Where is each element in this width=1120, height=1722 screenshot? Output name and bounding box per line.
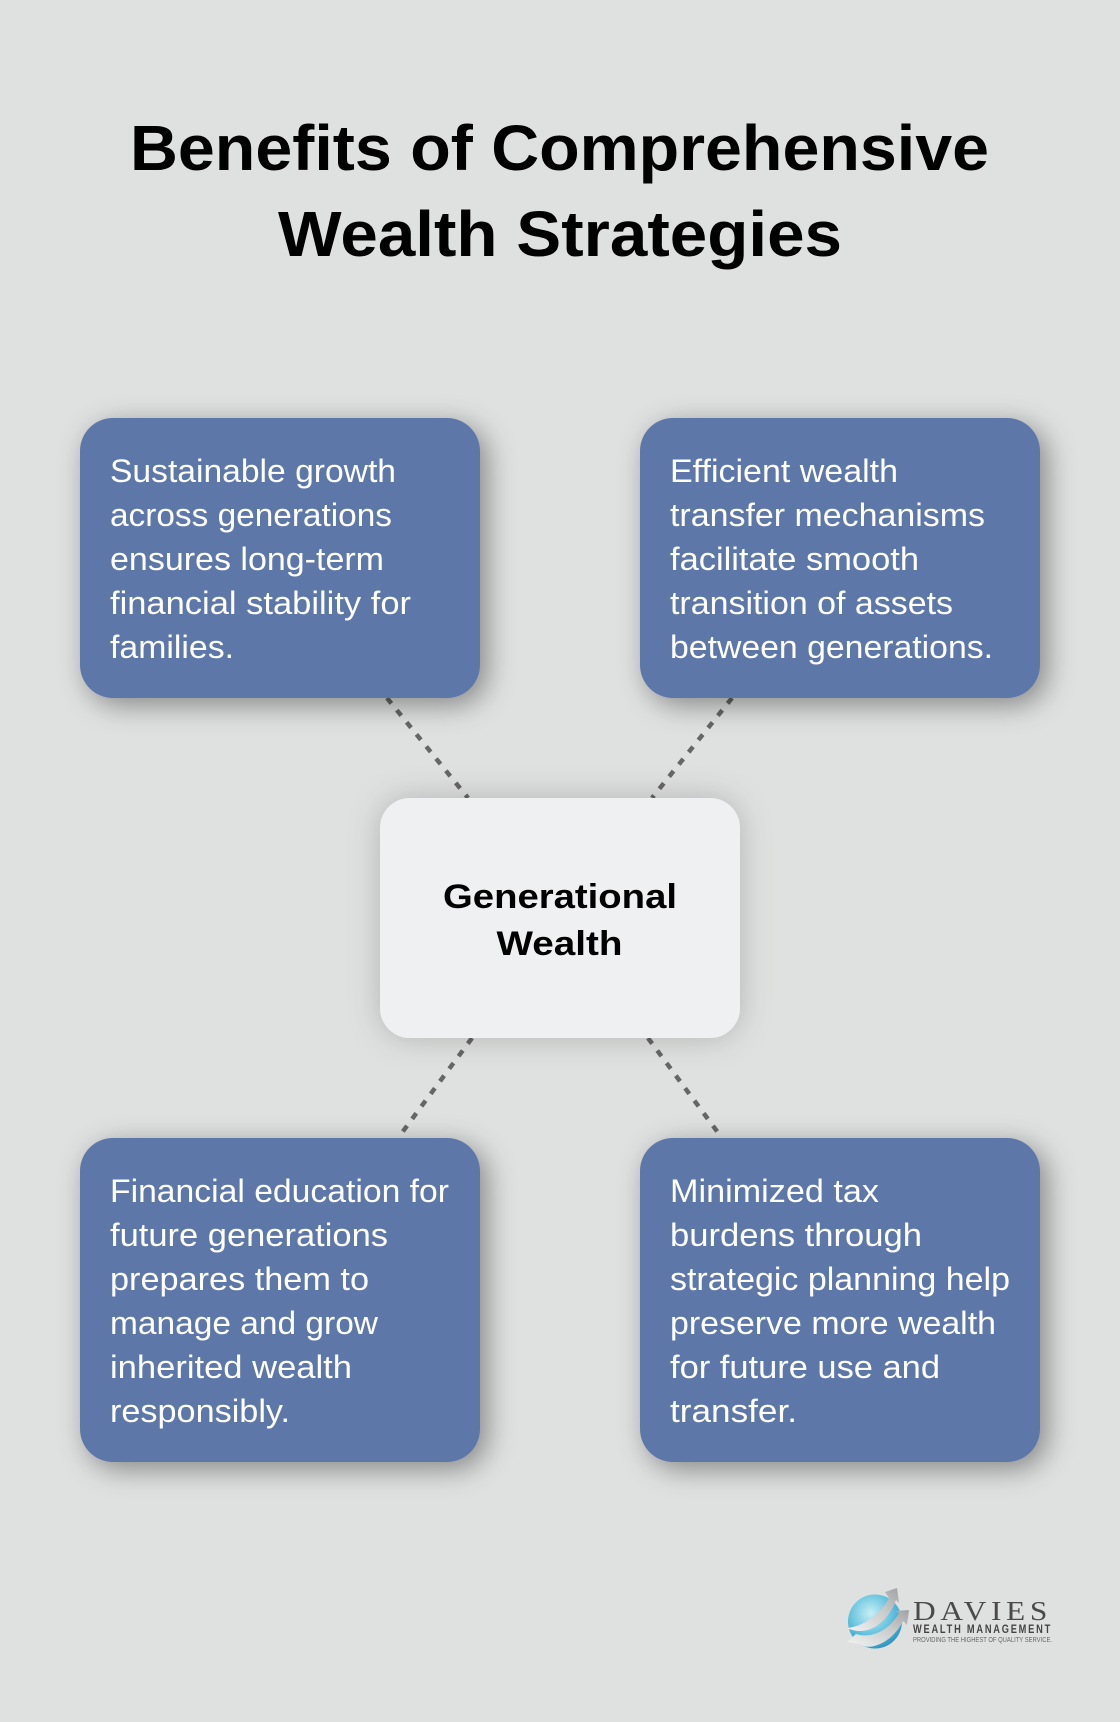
panel: minimized tax burdens: transfer. (670, 1393, 797, 1429)
panel: sustainable growth (80, 418, 480, 698)
panel: minimized tax burdens: strategic planning help (670, 1261, 1010, 1297)
panel: minimized tax burdens: for future use and (670, 1349, 940, 1385)
panel: efficient wealth transfer (640, 418, 1040, 698)
logo: Davies Wealth Management (847, 1588, 1052, 1648)
logo: Davies Wealth Management: DAVIES (913, 1596, 1052, 1626)
title: Benefits of Comprehensive (130, 112, 989, 184)
panel: sustainable growth: Sustainable growth (110, 453, 396, 489)
panel: financial education: responsibly. (110, 1393, 290, 1429)
panel: financial education (80, 1138, 480, 1462)
panel: efficient wealth transfer: transition of assets (670, 585, 953, 621)
panel: sustainable growth: financial stability for (110, 585, 411, 621)
panel: center generational wealth: Generational (443, 878, 677, 916)
panel: financial education: inherited wealth (110, 1349, 352, 1385)
title: Wealth Strategies (278, 198, 842, 270)
panel: center generational wealth (380, 798, 740, 1038)
panel: sustainable growth: across generations (110, 497, 392, 533)
panel: sustainable growth: families. (110, 629, 234, 665)
panel: efficient wealth transfer: between generations. (670, 629, 993, 665)
panel: minimized tax burdens: Minimized tax (670, 1173, 879, 1209)
panel: center generational wealth: Wealth (496, 925, 622, 963)
panel: financial education: Financial education for (110, 1173, 449, 1209)
panel: financial education: prepares them to (110, 1261, 369, 1297)
panel: minimized tax burdens (640, 1138, 1040, 1462)
panel: sustainable growth: ensures long-term (110, 541, 384, 577)
dotted connectors (387, 698, 732, 1138)
logo: Davies Wealth Management: WEALTH MANAGEMENT (913, 1624, 1052, 1636)
icon: globe with arrows (847, 1588, 909, 1648)
panel: efficient wealth transfer: Efficient wealth (670, 453, 898, 489)
title (130, 112, 989, 270)
panel: minimized tax burdens: burdens through (670, 1217, 922, 1253)
panel: efficient wealth transfer: transfer mechanisms (670, 497, 985, 533)
logo: Davies Wealth Management: PROVIDING THE HIGHEST OF QUALITY SERVICE. (913, 1637, 1052, 1644)
panel: minimized tax burdens: preserve more wealth (670, 1305, 996, 1341)
panel: financial education: manage and grow (110, 1305, 379, 1341)
panel: financial education: future generations (110, 1217, 388, 1253)
panel: efficient wealth transfer: facilitate smooth (670, 541, 919, 577)
